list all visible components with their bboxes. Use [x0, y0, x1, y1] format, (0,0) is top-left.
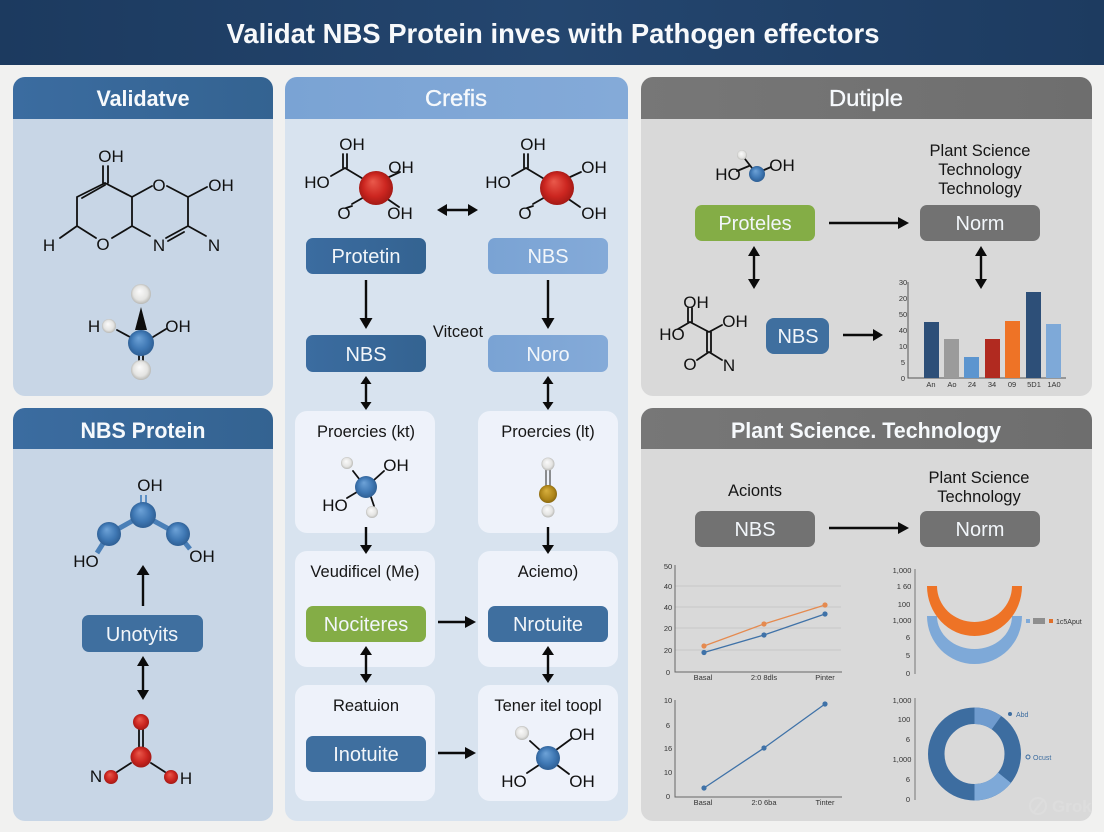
- structural molecule: [659, 293, 748, 375]
- box: Proteles: [695, 205, 815, 241]
- card: Aciemo: Nrotuite: [513, 614, 583, 636]
- molecule: red right: OH: [581, 204, 607, 223]
- molecule: red right: O: [518, 204, 532, 223]
- donut chart: 1,000: [893, 755, 911, 764]
- watermark: Grok: [1052, 797, 1092, 816]
- molecule: red left: HO: [304, 173, 330, 192]
- structural molecule: N: [723, 356, 735, 375]
- bar chart: 10: [899, 342, 907, 351]
- arrow: down right: [542, 280, 554, 329]
- card: Proercies left: HO: [322, 496, 348, 515]
- line chart: two series: 20: [664, 624, 672, 633]
- donut chart: 6: [906, 775, 910, 784]
- structural formula: O: [96, 235, 110, 254]
- line chart: two series: Basal: [694, 673, 713, 682]
- heading: Validatve: [96, 86, 190, 111]
- card: Aciemo: [478, 551, 618, 667]
- heading: Dutiple: [829, 85, 903, 111]
- line chart: two series: 40: [664, 603, 672, 612]
- arrow: Nociteres to Nrotuite: [438, 616, 476, 628]
- small molecule: OH: [769, 156, 795, 175]
- arrow: double Proteles: [748, 246, 760, 289]
- half ring chart: 6: [906, 633, 910, 642]
- bar chart: An: [926, 380, 936, 389]
- bar chart: 09: [1008, 380, 1016, 389]
- line chart: one series: 2:0 6ba: [751, 798, 777, 807]
- card: Tener itel toopl: OH: [569, 725, 595, 744]
- line chart: two series: [664, 562, 842, 682]
- box: NBS: [306, 335, 426, 372]
- box: Unotyits: [82, 615, 203, 652]
- arrow: double horizontal: [437, 204, 478, 216]
- text: Plant Science Technology: Plant Science: [930, 142, 1030, 160]
- ball and stick molecule: H: [88, 317, 100, 336]
- bar chart: 24: [968, 380, 976, 389]
- arrow: double left: [360, 376, 372, 410]
- line chart: one series: 0: [666, 792, 670, 801]
- card: Veudificel: Nociteres: [324, 614, 408, 636]
- half ring chart: 1,000: [893, 616, 911, 625]
- card: Proercies left: Proercies (kt): [317, 423, 415, 441]
- line chart: two series: 40: [664, 582, 672, 591]
- arrow: Inotuite to molecule: [438, 747, 476, 759]
- structural molecule: OH: [722, 312, 748, 331]
- box: Noro: [488, 335, 608, 372]
- molecule: red left: O: [337, 204, 351, 223]
- arrow: double right: [542, 376, 554, 410]
- arrow: Proteles to Norm: [829, 217, 909, 229]
- arrow: down left: [360, 280, 372, 329]
- box: NBS: NBS: [345, 344, 387, 366]
- title: Validat NBS Protein inves with Pathogen effectors: [226, 18, 880, 49]
- ball and stick molecule: [88, 284, 191, 380]
- box: Proteles: Proteles: [718, 213, 792, 235]
- line chart: two series: Pinter: [815, 673, 835, 682]
- structural formula: [43, 147, 234, 255]
- line chart: one series: 16: [664, 744, 672, 753]
- arrow: card down right: [542, 527, 554, 554]
- text: Plant Science Technology: Technology: [938, 161, 1022, 179]
- bar chart: 40: [899, 326, 907, 335]
- panel: Crefis: [285, 77, 628, 821]
- text: Plant Science Technology: [929, 469, 1029, 506]
- label: Vitceot: Vitceot: [433, 323, 483, 341]
- box: NBS light: [488, 238, 608, 274]
- donut chart: 6: [906, 735, 910, 744]
- structural formula: OH: [98, 147, 124, 166]
- arrow: double mid right: [542, 646, 554, 683]
- molecule: red left: OH: [388, 158, 414, 177]
- ball and stick molecule: OH: [165, 317, 191, 336]
- line chart: two series: 50: [664, 562, 672, 571]
- line chart: one series: Tinter: [816, 798, 835, 807]
- structural molecule: HO: [659, 325, 685, 344]
- molecule: red right: OH: [581, 158, 607, 177]
- half ring chart: 100: [898, 600, 910, 609]
- legend: Ocust: [1033, 755, 1051, 762]
- card: Proercies right: [478, 411, 618, 533]
- structural molecule: OH: [683, 293, 709, 312]
- bar chart: 30: [899, 278, 907, 287]
- bar chart: 5: [901, 358, 905, 367]
- bar chart: 34: [988, 380, 996, 389]
- card: Tener itel toopl: HO: [501, 772, 527, 791]
- card: Aciemo: Aciemo): [518, 563, 578, 581]
- donut chart: 100: [898, 715, 910, 724]
- red molecule: H: [180, 769, 192, 788]
- bar chart: 5D1: [1027, 380, 1041, 389]
- structural formula: N: [153, 236, 165, 255]
- molecule: red right: [485, 135, 607, 223]
- card: Reatuion: [295, 685, 435, 801]
- bar chart: Ao: [947, 380, 957, 389]
- card: Proercies left: [295, 411, 435, 533]
- arrow: card down left: [360, 527, 372, 554]
- card: Reatuion: Reatuion: [333, 697, 399, 715]
- line chart: one series: Basal: [694, 798, 713, 807]
- half ring chart: 1,000: [893, 566, 911, 575]
- panel: Plant Science. Technology: [641, 408, 1092, 821]
- line chart: two series: 2:0 8dls: [751, 673, 777, 682]
- structural molecule: O: [683, 355, 697, 374]
- small molecule: HO: [715, 165, 741, 184]
- donut chart: 1,000: [893, 696, 911, 705]
- arrow: double vertical: [137, 656, 149, 700]
- text: Plant Science Technology: Technology: [937, 488, 1021, 506]
- arrow: up: [136, 565, 150, 606]
- box: Protetin: Protetin: [332, 246, 400, 268]
- arrow: double Norm: [975, 246, 987, 289]
- heading: Plant Science. Technology: [731, 418, 1002, 443]
- bar chart: 20: [899, 294, 907, 303]
- blue molecule: OH: [137, 476, 163, 495]
- structural formula: H: [43, 236, 55, 255]
- box: Noro: Noro: [526, 344, 570, 366]
- card: Tener itel toopl: [478, 685, 618, 801]
- red molecule: [90, 714, 192, 788]
- legend: [1008, 712, 1051, 762]
- red molecule: N: [90, 767, 102, 786]
- half ring chart: 1 60: [897, 582, 911, 591]
- molecule: red left: [304, 135, 414, 223]
- arrow: NBS to Norm: [829, 522, 909, 534]
- molecule: red left: OH: [387, 204, 413, 223]
- legend: Abd: [1016, 712, 1029, 719]
- molecule: red right: OH: [520, 135, 546, 154]
- molecule: red left: OH: [339, 135, 365, 154]
- half ring chart: 5: [906, 651, 910, 660]
- bar chart: 1A0: [1047, 380, 1061, 389]
- panel: Dutiple: [641, 77, 1092, 396]
- card: Veudificel: Veudificel (Me): [310, 563, 420, 581]
- structural formula: O: [152, 176, 166, 195]
- arrow: NBS to chart: [843, 329, 883, 341]
- box: NBS gray: [695, 511, 815, 547]
- box: Unotyits: Unotyits: [106, 624, 178, 646]
- line chart: two series: 20: [664, 646, 672, 655]
- text: Plant Science Technology: Technology: [938, 180, 1022, 198]
- text: Plant Science Technology: Plant Science: [929, 469, 1029, 487]
- line chart: one series: [664, 696, 842, 807]
- panel: NBS Protein: [13, 408, 273, 821]
- legend: 1c5Aput: [1056, 619, 1082, 626]
- arrow: double mid left: [360, 646, 372, 683]
- line chart: one series: 10: [664, 696, 672, 705]
- structural formula: OH: [208, 176, 234, 195]
- box: NBS gray: NBS: [734, 519, 776, 541]
- text: Plant Science Technology: [930, 142, 1030, 198]
- title banner: [0, 0, 1104, 65]
- box: Norm: Norm: [956, 213, 1004, 235]
- watermark: [1030, 797, 1092, 816]
- line chart: two series: 0: [666, 668, 670, 677]
- box: Protetin: [306, 238, 426, 274]
- panel: Validatve: [13, 77, 273, 396]
- box: NBS: NBS: [777, 326, 819, 348]
- small molecule: [715, 150, 795, 184]
- card: Reatuion: Inotuite: [333, 744, 399, 766]
- bar chart: 0: [901, 374, 905, 383]
- box: Norm gray: [920, 511, 1040, 547]
- line chart: one series: 10: [664, 768, 672, 777]
- legend: [1026, 618, 1082, 626]
- box: NBS: [766, 318, 829, 354]
- half ring chart: [893, 566, 1082, 678]
- card: Proercies left: OH: [383, 456, 409, 475]
- molecule: red right: HO: [485, 173, 511, 192]
- box: Norm gray: Norm: [956, 519, 1004, 541]
- card: Proercies right: Proercies (lt): [501, 423, 595, 441]
- card: Tener itel toopl: Tener itel toopl: [494, 697, 602, 715]
- donut chart: [893, 696, 1051, 804]
- blue molecule: [73, 476, 215, 571]
- half ring chart: 0: [906, 669, 910, 678]
- bar chart: 50: [899, 310, 907, 319]
- box: Norm: [920, 205, 1040, 241]
- donut chart: 0: [906, 795, 910, 804]
- heading: Crefis: [425, 85, 487, 111]
- box: NBS light: NBS: [527, 246, 569, 268]
- structural formula: N: [208, 236, 220, 255]
- label: Acionts: Acionts: [728, 482, 782, 500]
- blue molecule: HO: [73, 552, 99, 571]
- line chart: one series: 6: [666, 721, 670, 730]
- bar chart: [899, 278, 1066, 389]
- card: Tener itel toopl: OH: [569, 772, 595, 791]
- heading: NBS Protein: [80, 418, 206, 443]
- blue molecule: OH: [189, 547, 215, 566]
- card: Veudificel: [295, 551, 435, 667]
